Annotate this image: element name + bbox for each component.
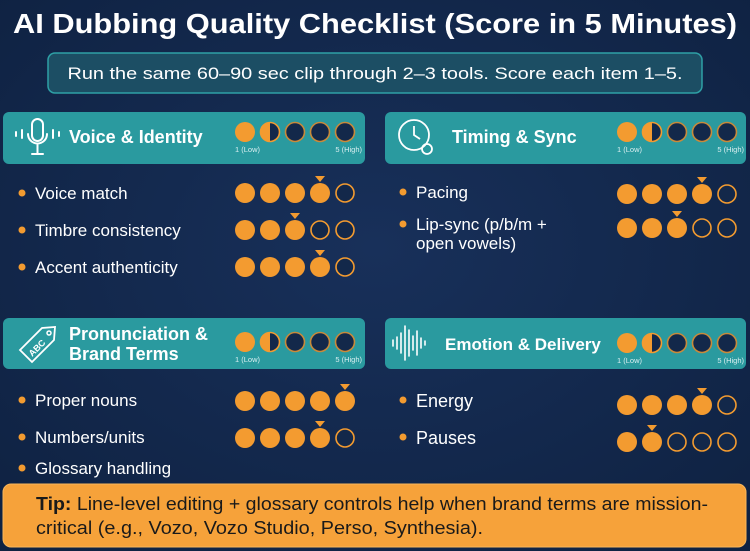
panel: voice & identity [3, 112, 365, 277]
header: timing & sync [385, 112, 746, 164]
item: pacing: Pacing [416, 183, 468, 202]
icon: ABC tag [20, 327, 55, 362]
tip callout [3, 484, 746, 547]
header: pronunciation: Brand Terms [69, 344, 179, 364]
item: voice match: Voice match [35, 184, 128, 203]
header: voice & identity: Voice & Identity [69, 127, 203, 147]
item: glossary handling: Glossary handling [35, 459, 171, 478]
tip callout: critical (e.g., Vozo, Vozo Studio, Perso, Synthesia). [36, 518, 483, 538]
item: numbers/units: Numbers/units [35, 428, 145, 447]
icon: waveform [393, 326, 425, 360]
item: pauses [400, 425, 736, 452]
icon: ABC tag: ABC [27, 337, 48, 358]
header: pronunciation [3, 318, 365, 369]
subtitle box: Run the same 60–90 sec clip through 2–3 tools. Score each item 1–5. [68, 64, 682, 83]
item: pacing [400, 177, 736, 204]
item: numbers/units [18, 421, 354, 448]
panel: emotion & delivery [385, 318, 746, 452]
item: lip-sync: Lip-sync (p/b/m + [416, 215, 547, 234]
item: proper nouns [18, 384, 355, 411]
panel: timing & sync [385, 112, 746, 253]
icon: clock with gear [399, 120, 432, 154]
item: energy: Energy [416, 391, 473, 411]
title: AI Dubbing Quality Checklist (Score in 5 Minutes) [13, 8, 737, 39]
item: lip-sync: open vowels) [416, 234, 516, 253]
item: timbre consistency [18, 213, 354, 240]
header: voice & identity [3, 112, 365, 164]
item: energy [400, 388, 736, 415]
item: accent authenticity [18, 250, 354, 277]
item: voice match [18, 176, 354, 203]
item: pauses: Pauses [416, 428, 476, 448]
subtitle box [48, 53, 702, 93]
icon: microphone [16, 119, 59, 154]
item: accent authenticity: Accent authenticity [35, 258, 178, 277]
header: timing & sync: Timing & Sync [452, 127, 577, 147]
panel: pronunciation & brand terms [3, 318, 365, 478]
item: proper nouns: Proper nouns [35, 391, 137, 410]
header: emotion: Emotion & Delivery [445, 335, 601, 354]
tip callout: Tip: Line-level editing + glossary controls help when brand terms are mission- [36, 494, 708, 514]
item: timbre consistency: Timbre consistency [35, 221, 181, 240]
item: lip-sync [400, 211, 736, 253]
header: emotion [385, 318, 746, 369]
header: pronunciation: Pronunciation & [69, 324, 208, 344]
